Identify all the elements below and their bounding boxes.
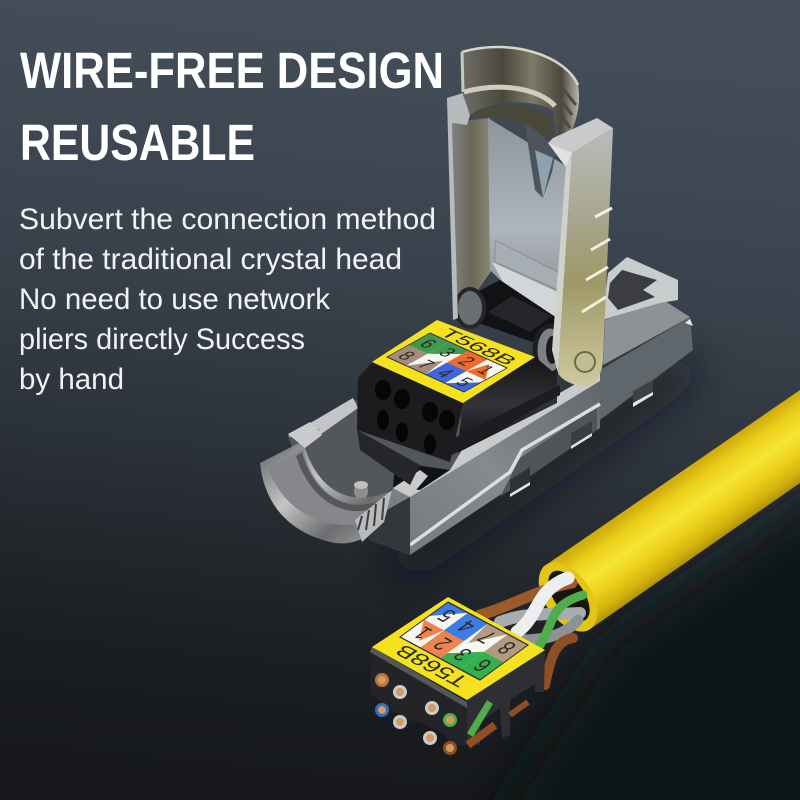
wiring label T568B upside-down: 5: [432, 605, 462, 625]
wiring label T568B upside-down: [372, 597, 545, 700]
lid inner: [452, 118, 566, 340]
wiring label T568B: T568B: [435, 326, 523, 368]
floor shadows: [380, 350, 800, 800]
connector tail: [600, 257, 693, 420]
title: [20, 42, 444, 171]
wiring label T568B upside-down: 7: [472, 627, 502, 647]
base outer wall: [360, 370, 600, 555]
wiring label T568B upside-down: 6: [468, 655, 498, 675]
wiring label T568B: 7: [412, 357, 440, 372]
lid left frame: [447, 93, 470, 320]
description text: No need to use network: [19, 283, 331, 316]
title: WIRE-FREE DESIGN: [20, 42, 444, 99]
loose wires: [480, 578, 583, 685]
wiring label T568B: 2: [453, 354, 481, 369]
left half-round crimp: [260, 422, 428, 543]
wiring label T568B upside-down: 1: [408, 623, 438, 643]
wiring label T568B: 6: [414, 336, 443, 351]
description text: pliers directly Success: [19, 323, 305, 356]
wiring label T568B: 3: [434, 345, 462, 360]
description text: [19, 203, 436, 396]
wiring label T568B upside-down: T568B: [389, 641, 474, 691]
contact pins: [376, 674, 456, 754]
description text: by hand: [19, 363, 124, 396]
terminal block with wires: [370, 597, 545, 754]
base floor and inner wall: [288, 398, 480, 520]
lid right plate: [548, 118, 613, 386]
description text: of the traditional crystal head: [19, 243, 402, 276]
wiring label T568B upside-down: 8: [492, 637, 522, 657]
wiring label T568B: 5: [451, 374, 479, 389]
description text: Subvert the connection method: [19, 203, 436, 236]
wiring label T568B upside-down: 2: [428, 633, 458, 653]
terminal block body: [357, 357, 560, 485]
yellow cable: [527, 390, 800, 642]
wiring label T568B upside-down: 3: [448, 644, 478, 664]
internal wire stubs: [468, 702, 528, 745]
title: REUSABLE: [20, 114, 255, 171]
wiring label T568B: [372, 320, 535, 403]
wiring label T568B upside-down: 4: [452, 616, 482, 636]
block body: [370, 647, 545, 745]
wiring label T568B: 1: [472, 362, 500, 377]
wiring label T568B: 8: [393, 348, 421, 363]
open shielded connector: [260, 47, 693, 555]
hinge rollers: [456, 280, 565, 374]
top half-round crimp: [462, 47, 579, 145]
wiring label T568B: 4: [431, 366, 460, 381]
